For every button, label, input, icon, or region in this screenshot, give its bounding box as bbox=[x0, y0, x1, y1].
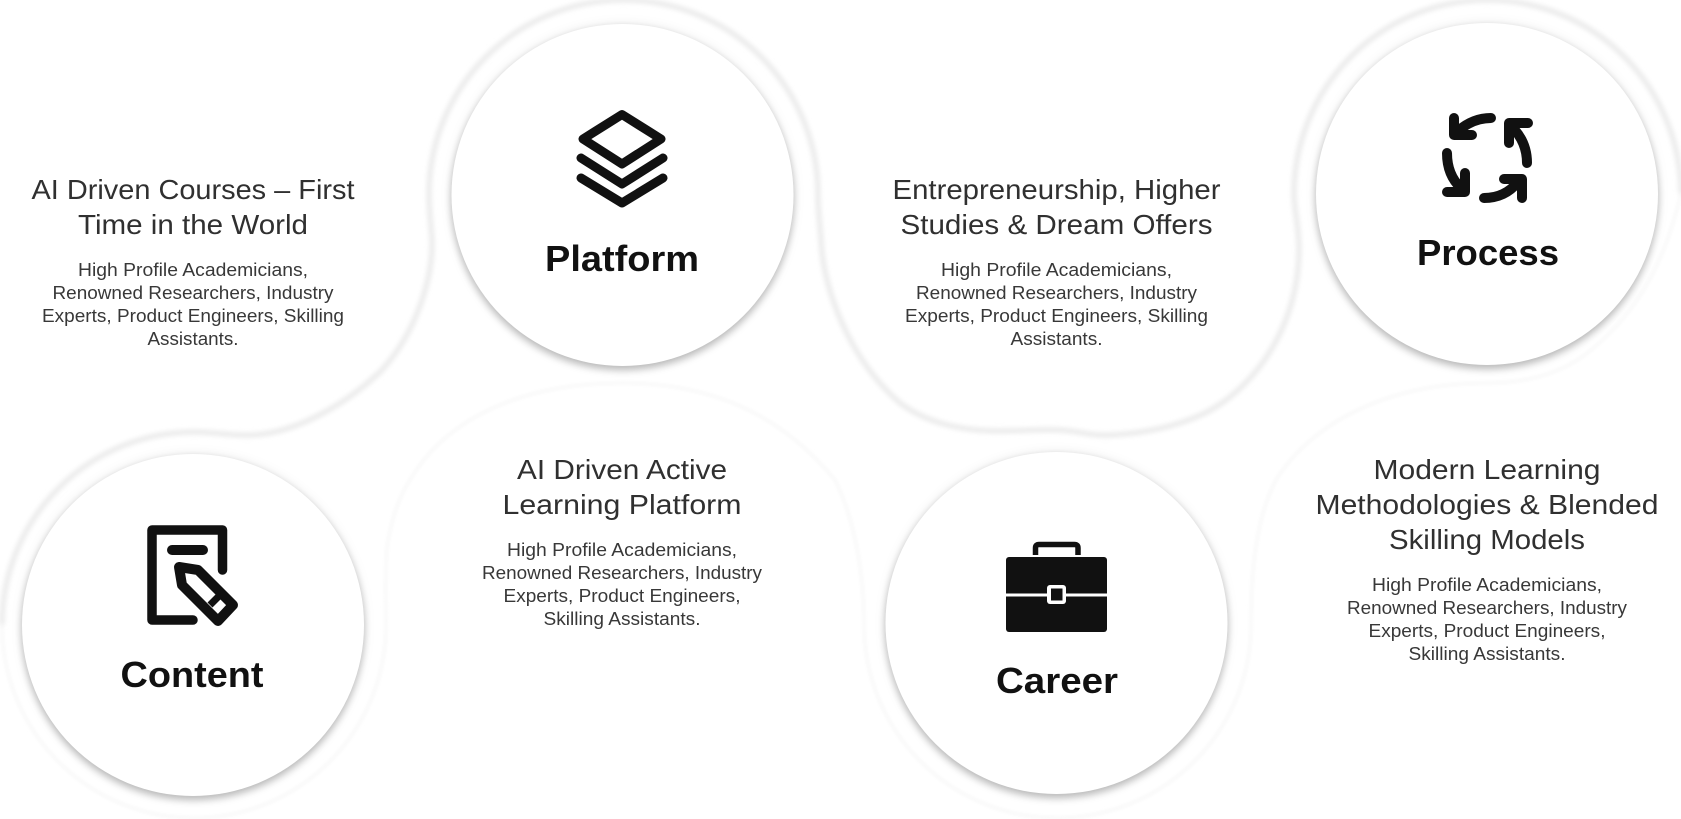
panel: text block AI Driven Active: Learning Platform bbox=[502, 489, 742, 520]
panel: text block Modern Learning bbox=[1316, 454, 1658, 664]
icon: stacked layers bbox=[581, 114, 663, 203]
panel: text block Entrepreneurship: Studies & Dream Offers bbox=[900, 209, 1212, 240]
panel: Platform circle bbox=[452, 24, 794, 366]
panel: text block AI Driven Courses: AI Driven Courses – First bbox=[32, 174, 355, 205]
panel: text block AI Driven Active: High Profile Academicians, bbox=[507, 540, 737, 560]
panel: text block Entrepreneurship: Experts, Product Engineers, Skilling bbox=[905, 306, 1208, 326]
panel: Platform circle: Platform bbox=[545, 238, 699, 279]
panel: Career circle bbox=[886, 452, 1228, 794]
icon: document with pencil bbox=[152, 530, 233, 621]
panel: text block Entrepreneurship: Assistants. bbox=[1010, 329, 1102, 349]
icon: cycle arrows bbox=[1447, 118, 1528, 198]
panel: text block AI Driven Active: Skilling Assistants. bbox=[544, 609, 700, 629]
icon: briefcase bbox=[1006, 544, 1107, 632]
panel: text block Entrepreneurship bbox=[892, 174, 1220, 349]
panel: text block AI Driven Active: Experts, Product Engineers, bbox=[504, 586, 740, 606]
panel: text block Modern Learning: Experts, Product Engineers, bbox=[1368, 621, 1606, 641]
panel: text block AI Driven Courses: Time in the World bbox=[78, 209, 308, 240]
panel: text block AI Driven Active bbox=[482, 454, 762, 629]
panel: text block Entrepreneurship: Entrepreneurship, Higher bbox=[892, 174, 1220, 205]
panel: text block Modern Learning: Modern Learning bbox=[1374, 454, 1600, 485]
panel: text block Modern Learning: Skilling Assistants. bbox=[1408, 644, 1566, 664]
panel: text block Entrepreneurship: High Profile Academicians, bbox=[941, 260, 1172, 280]
panel: text block Modern Learning: High Profile Academicians, bbox=[1372, 575, 1602, 595]
panel: text block Modern Learning: Skilling Models bbox=[1389, 524, 1585, 555]
panel: text block AI Driven Courses bbox=[32, 174, 355, 349]
panel: text block AI Driven Courses: High Profile Academicians, bbox=[78, 260, 308, 280]
panel: text block Entrepreneurship: Renowned Researchers, Industry bbox=[916, 283, 1197, 303]
panel: text block AI Driven Courses: Assistants. bbox=[148, 329, 238, 349]
panel: text block AI Driven Active: AI Driven Active bbox=[517, 454, 727, 485]
panel: Process circle: Process bbox=[1417, 232, 1559, 273]
panel: text block AI Driven Courses: Experts, Product Engineers, Skilling bbox=[42, 306, 344, 326]
panel: text block AI Driven Active: Renowned Researchers, Industry bbox=[482, 563, 762, 583]
panel: text block Modern Learning: Renowned Researchers, Industry bbox=[1347, 598, 1627, 618]
panel: Content circle bbox=[22, 454, 364, 796]
panel: text block AI Driven Courses: Renowned Researchers, Industry bbox=[52, 283, 334, 303]
panel: Career circle: Career bbox=[996, 660, 1118, 701]
panel: text block Modern Learning: Methodologies & Blended bbox=[1316, 489, 1658, 520]
panel: Process circle bbox=[1316, 23, 1658, 365]
panel: Content circle: Content bbox=[120, 654, 264, 695]
